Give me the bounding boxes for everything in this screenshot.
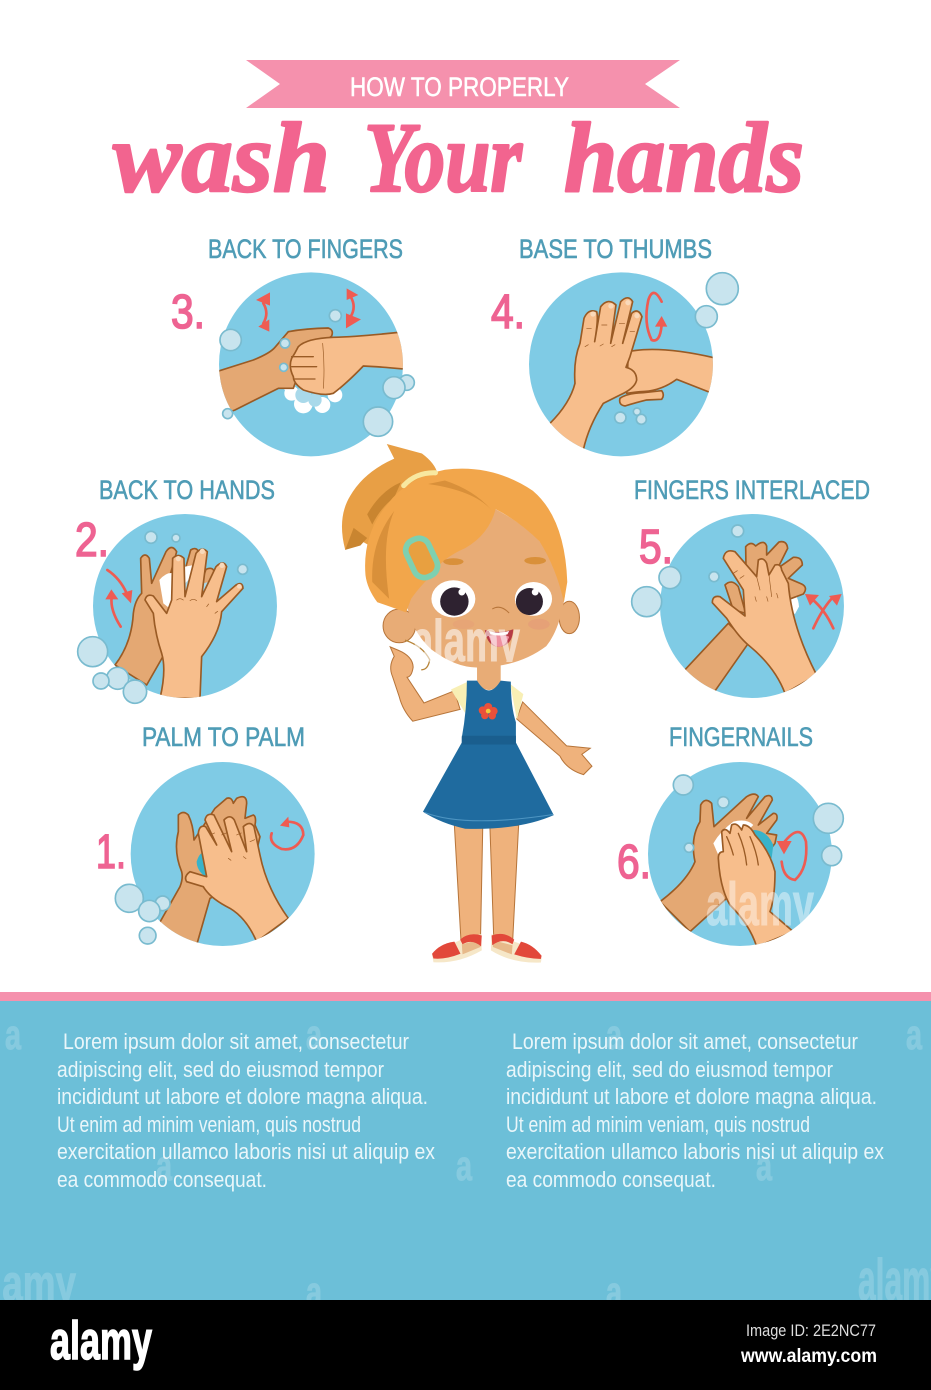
text column right: [506, 1029, 884, 1192]
text column right: incididunt ut labore et dolore magna aliqua.: [506, 1084, 877, 1109]
step 5: fingers interlaced: [632, 475, 870, 698]
text column right: Lorem ipsum dolor sit amet, consectetur: [512, 1029, 858, 1054]
face: [406, 508, 565, 667]
step 6: fingernails: 6.: [617, 836, 651, 889]
title: hands: [564, 102, 804, 213]
eyes: [431, 580, 475, 617]
step 2: back to hands: [75, 475, 277, 703]
ponytail: [342, 444, 437, 550]
hair band: [404, 473, 435, 486]
black footer: alamy: [50, 1311, 152, 1371]
step 4: base to thumbs: BASE TO THUMBS: [519, 234, 712, 264]
step 5: fingers interlaced: 5.: [639, 521, 673, 574]
step 2: back to hands: 2.: [75, 514, 109, 567]
step 3: back to fingers: [171, 234, 414, 456]
text column left: Lorem ipsum dolor sit amet, consectetur: [63, 1029, 409, 1054]
title: Your: [364, 102, 523, 213]
right arm: [517, 702, 592, 775]
text column right: exercitation ullamco laboris nisi ut aliquip ex: [506, 1139, 884, 1164]
text column left: adipiscing elit, sed do eiusmod tempor: [57, 1057, 384, 1082]
title: [113, 102, 804, 213]
text column right: adipiscing elit, sed do eiusmod tempor: [506, 1057, 833, 1082]
step 2: back to hands: BACK TO HANDS: [99, 475, 275, 505]
hair strand: [405, 640, 430, 670]
mouth: [485, 629, 513, 647]
step 5: fingers interlaced: FINGERS INTERLACED: [634, 475, 870, 505]
watermarks: a: [606, 1268, 622, 1315]
watermark on girl: alamy: [412, 609, 520, 674]
watermarks: [0, 1011, 931, 1315]
text column left: exercitation ullamco laboris nisi ut aliquip ex: [57, 1139, 435, 1164]
left arm with thumb up: [390, 647, 460, 721]
text column left: [57, 1029, 435, 1192]
watermarks: a: [306, 1268, 322, 1315]
black footer: [0, 1300, 931, 1390]
text column left: incididunt ut labore et dolore magna aliqua.: [57, 1084, 428, 1109]
step 1: palm to palm: [96, 722, 315, 946]
dress: [423, 681, 554, 829]
step 4: base to thumbs: 4.: [491, 286, 525, 339]
girl character: [342, 444, 592, 963]
text column left: Ut enim ad minim veniam, quis nostrud: [57, 1112, 361, 1137]
watermarks: a: [456, 1142, 472, 1189]
watermarks: a: [756, 1142, 772, 1189]
step 4: base to thumbs: [491, 234, 738, 456]
watermarks: a: [606, 1011, 622, 1058]
text column right: ea commodo consequat.: [506, 1167, 716, 1192]
banner: how to properly: [246, 60, 680, 108]
blue text panel: [0, 1001, 931, 1315]
watermarks: a: [306, 1011, 322, 1058]
hair: [365, 469, 567, 612]
watermarks: a: [156, 1142, 172, 1189]
legs: [454, 825, 519, 944]
sleeves: [451, 682, 468, 713]
text column left: ea commodo consequat.: [57, 1167, 267, 1192]
hair clip: [402, 535, 441, 581]
watermarks: a: [5, 1011, 21, 1058]
ears: [383, 609, 416, 643]
text column right: Ut enim ad minim veniam, quis nostrud: [506, 1112, 810, 1137]
shoes: [432, 934, 542, 963]
neck: [477, 656, 501, 690]
step 3: back to fingers: 3.: [171, 286, 205, 339]
nose and cheek: [492, 607, 509, 613]
step 3: back to fingers: BACK TO FINGERS: [208, 234, 403, 264]
watermarks: a: [906, 1011, 922, 1058]
brows: [443, 558, 464, 565]
banner: how to properly: HOW TO PROPERLY: [350, 72, 569, 102]
watermark on step 6: alamy: [706, 871, 814, 938]
flower: [479, 703, 498, 720]
step 1: palm to palm: PALM TO PALM: [142, 722, 305, 752]
black footer: Image ID: 2E2NC77: [746, 1321, 876, 1340]
step 6: fingernails: FINGERNAILS: [669, 722, 813, 752]
pink divider: [0, 992, 931, 1001]
step 6: fingernails: [617, 722, 843, 947]
title: wash: [113, 102, 330, 213]
black footer: www.alamy.com: [740, 1346, 877, 1367]
step 1: palm to palm: 1.: [96, 826, 126, 879]
